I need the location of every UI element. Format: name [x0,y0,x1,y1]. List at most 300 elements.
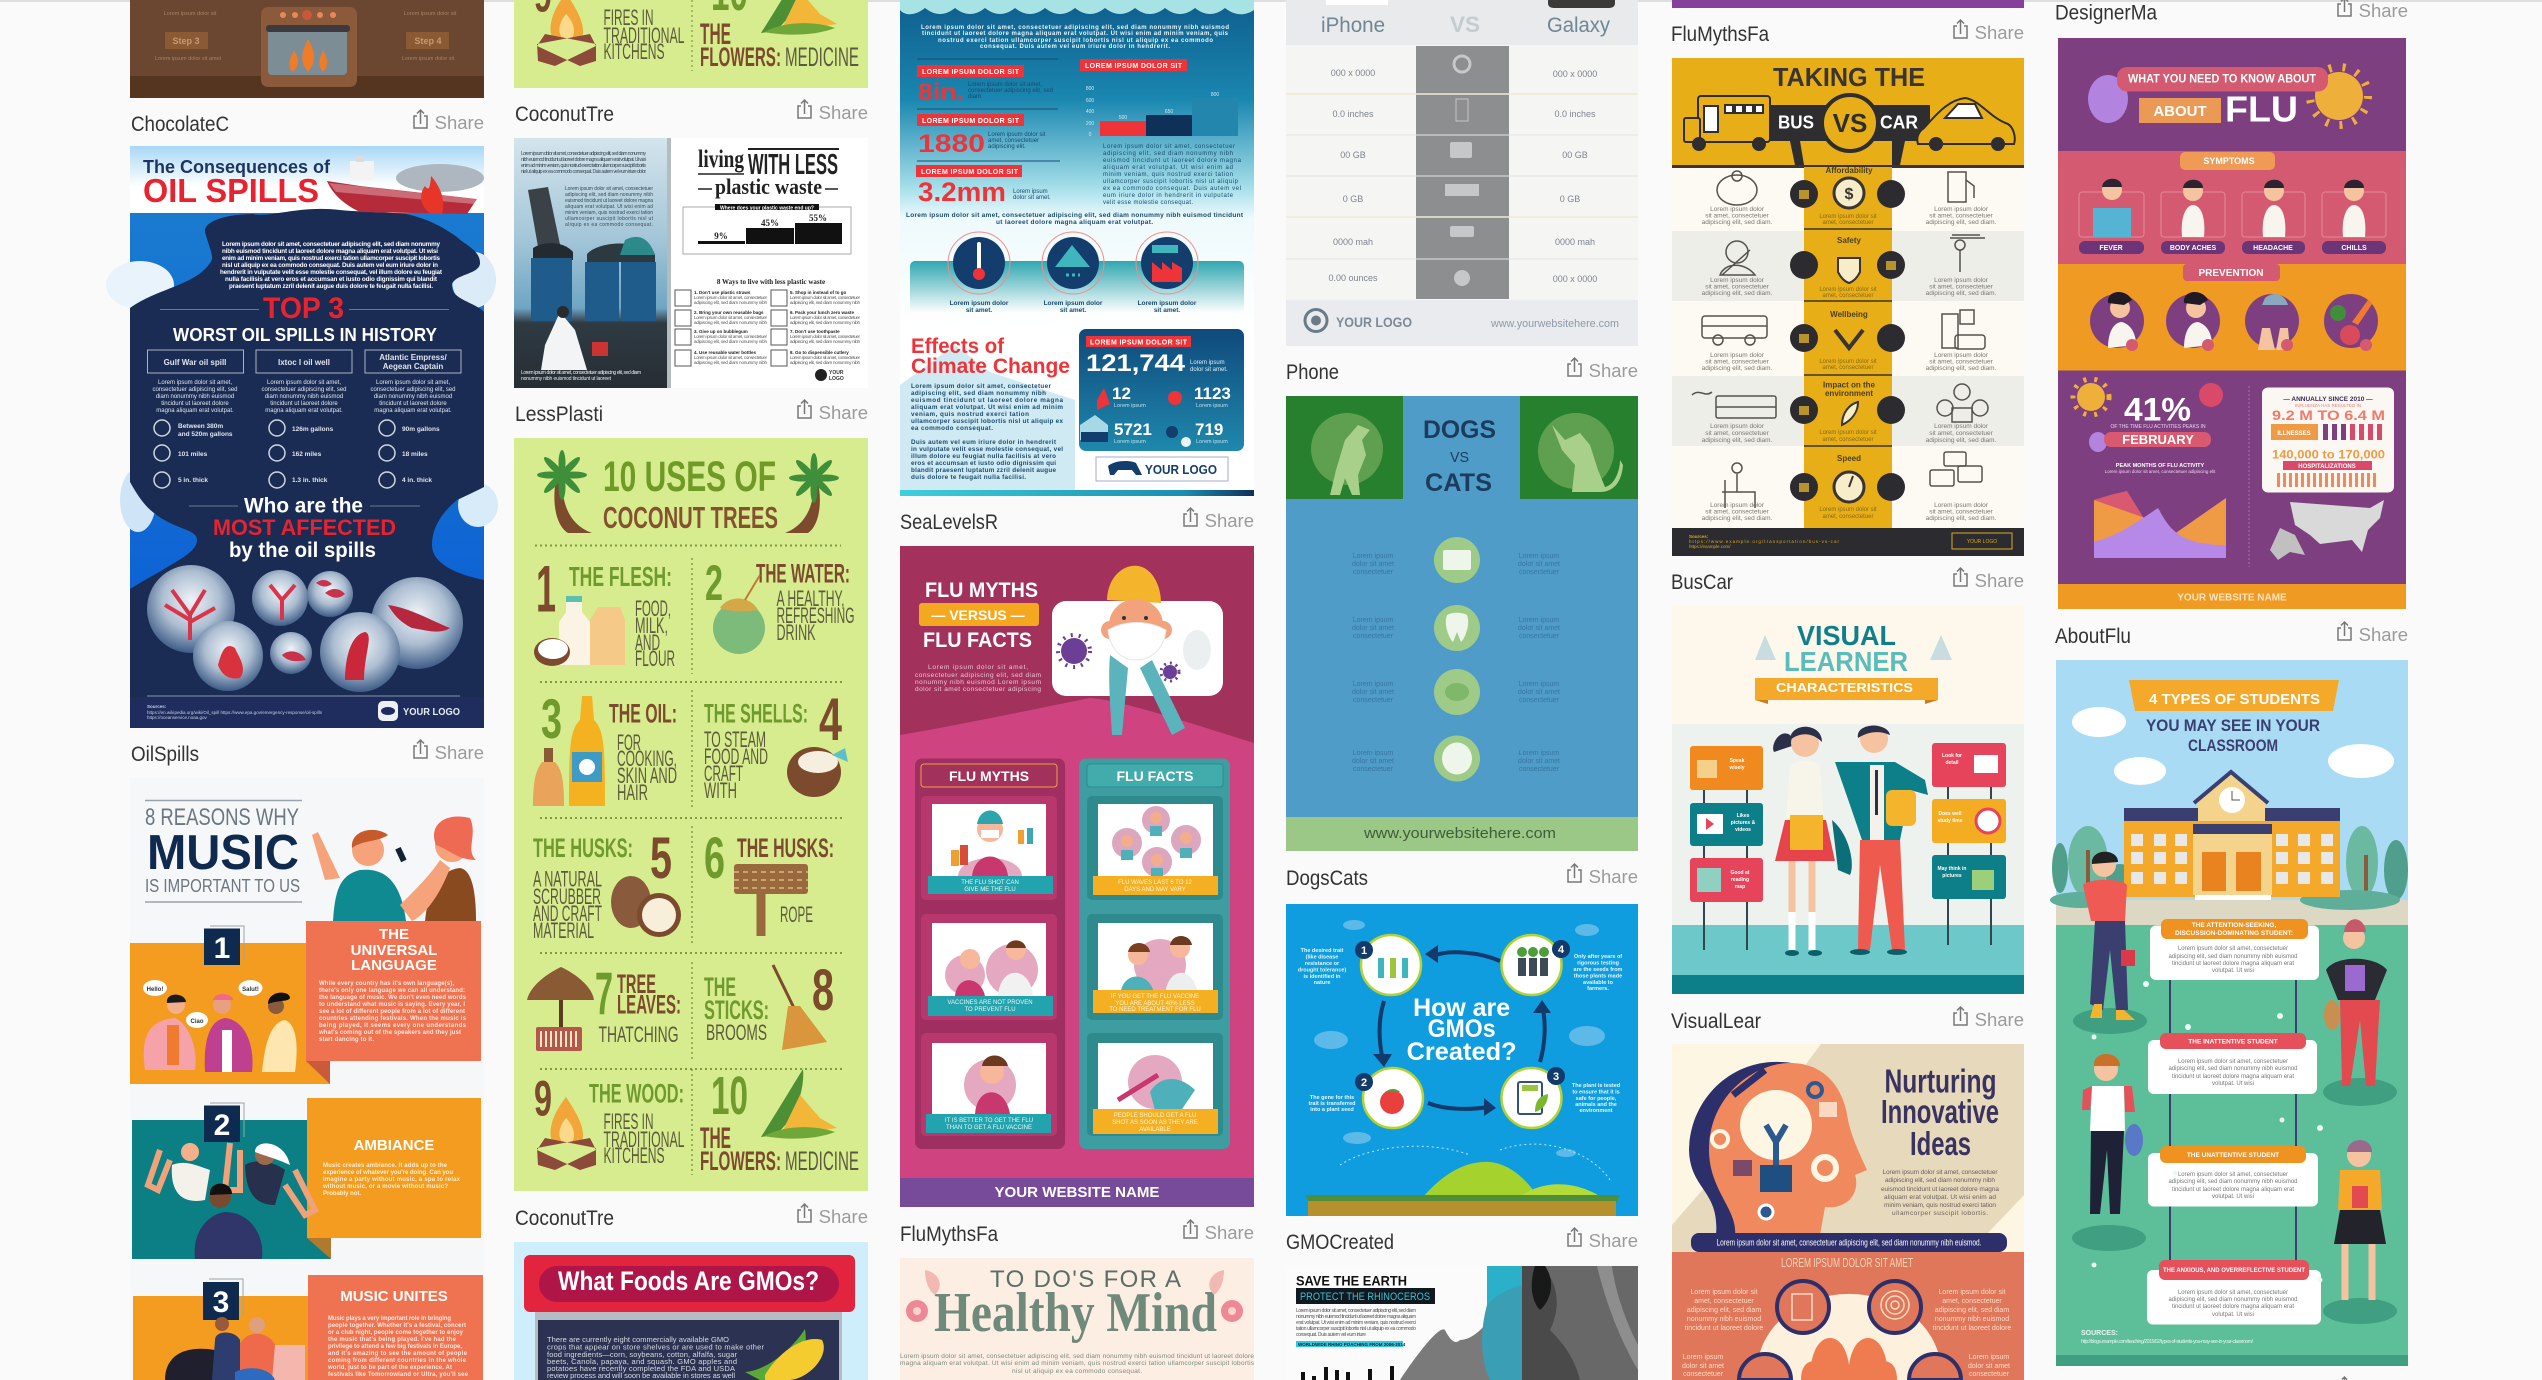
intro text: tincidunt ut laoreet dolore magna aliquam erat volutpat. Ut wisi enim ad minim veniam, quis [922,31,1229,37]
banner: CLASSROOM [2188,736,2278,755]
caption: SeaLevelsR [900,508,1254,534]
side text: nonummy nibh euismod [1687,1316,1761,1323]
step descriptions: rigorous testing [1577,960,1619,966]
row: wood and flowers: THE [700,18,731,51]
arrowheads [1373,945,1551,1116]
intro text: magna aliquam erat volutpat. Ut wisi enim ad minim veniam, quis nostrud exerci tation ullamcorper suscipit lobortis [900,1360,1255,1367]
use 3: oil: THE OIL: [609,698,677,728]
ways list: Lorem ipsum dolor sit amet, consectetuer [790,355,860,360]
center title: Created? [1407,1038,1517,1066]
step descriptions: The desired trait [1301,948,1344,954]
title: TO DO'S FOR A [990,1266,1181,1293]
column: flu facts: FLU FACTS [1116,768,1194,784]
center labels [1823,166,1876,463]
step descriptions: is identified in [1304,974,1341,980]
cycle arrows [1380,952,1545,1109]
column: flu myths: TO PREVENT FLU [964,1007,1016,1013]
panel: visual learner thumbnail [1672,606,2024,994]
ways list: 3. Give up on bubblegum [694,329,748,334]
illustration: three people [143,980,297,1072]
section 2: blocks [132,1098,481,1259]
header: TAKING THE [1773,62,1925,92]
row text: sit amet, consectetuer [1705,358,1770,366]
info card 4: THE ANXIOUS, AND OVERREFLECTIVE STUDENT [2163,1267,2305,1274]
stat values: 1880 [918,130,985,158]
number badges: 3 [1553,1071,1559,1083]
comparison icons [1434,537,1480,782]
illustration: friends on sofa [165,1317,305,1380]
caption: LessPlasti: Share [819,402,868,423]
marine life bubbles [147,565,463,692]
center labels: Speed [1837,454,1861,463]
step icons [1378,947,1549,1114]
stat: 41 percent: FEBRUARY [2122,432,2194,447]
text: ambiance: without music, or a movie without music? [322,1184,448,1190]
heading: top 3: WORST OIL SPILLS IN HISTORY [173,325,437,345]
intro text: potatoes have recently completed the FDA and USDA [547,1364,735,1373]
caption: OilSpills [131,740,484,766]
info card 2: volutpat. Ut wisi [2212,1081,2254,1087]
logo: YOUR [829,370,844,376]
stats panel: LOREM IPSUM DOLOR SIT [1090,340,1188,346]
intro text: Lorem ipsum dolor sit amet, consectetuer adipiscing elit, sed diam nonummy nibh euismod tincidunt ut laoreet dolore [900,1353,1254,1360]
panel: phone comparison thumbnail [1286,0,1638,346]
illustration: three people: Hello! [147,987,163,993]
stat: 41 percent: Lorem ipsum dolor sit amet, consectetuer adipiscing elit [2105,469,2216,474]
left and right icons [1692,171,1988,508]
title [143,157,331,209]
title: DOGS [1423,416,1496,444]
card: annual statistics: ILLNESSES [2277,431,2311,437]
left signs: pictures & [1731,820,1756,826]
side text: tincidunt ut laoreet dolore [1685,1325,1763,1332]
info card 4: volutpat. Ut wisi [2212,1312,2254,1318]
use 4: shells [704,686,848,803]
caption: GMOCreated: GMOCreated [1286,1231,1394,1254]
bar chart: 650 [1165,109,1173,115]
spill descriptions: tincidunt ut laoreet dolore [379,401,447,407]
use 7: leaves: TREE [617,969,656,999]
row: wood and flowers: FLOWERS: [700,42,781,72]
caption: GMOCreated: Share [1589,1230,1638,1251]
column: flu facts: AVAILABLE [1139,1127,1171,1133]
intro text: consequat. Duis autem vel eum iriure dolor in hendrerit. [980,44,1170,50]
snow dots [2092,981,2323,1282]
caption: SeaLevelsR: SeaLevelsR [900,511,998,534]
row text: Lorem ipsum [1353,681,1393,688]
title: Lorem ipsum dolor sit amet, [928,664,1028,671]
row text: sit amet, consectetuer [1929,358,1994,366]
title [2088,67,2368,130]
spill stats: 4 in. thick [402,477,432,484]
use 5: husks: MATERIAL [533,918,594,943]
text: chart notes: aliquam erat volutpat. Ut wisi enim ad [1103,165,1233,171]
header: VS [1833,108,1867,138]
title: COCONUT TREES [603,500,778,535]
use 7: leaves [527,960,681,1051]
text: universal language: what's coming out of the speakers and they just [318,1030,461,1036]
sources: http://blogs.example.com/teaching/2015/02/types-of-students-you-may-see-in-your-classroom/ [2081,1339,2254,1345]
title: CATS [1425,469,1492,497]
coral section [1672,1233,2024,1380]
footer: Sources: [1689,534,1709,539]
text: effects: Lorem ipsum dolor sit amet, consectetuer [911,383,1052,390]
step descriptions: trait is transferred [1308,1101,1356,1107]
title: FLU FACTS [923,629,1032,652]
icon: bus [1684,96,1770,150]
stats panel: 121,744 [1086,350,1186,377]
bottom strip [900,490,1254,496]
center strip [1804,167,1892,531]
caption: FluMythsFa column five: Share [1975,22,2024,43]
column: flu facts: FLU WAVES LAST 6 TO 12 [1118,880,1193,886]
info card 1: tincidunt ut laoreet dolore magna aliquam erat [2172,961,2294,967]
bar chart: Where does your plastic waste end up? [720,206,814,212]
caption: Phone [1286,358,1638,384]
panel: oil spills thumbnail [106,146,498,728]
title: — VERSUS — [931,607,1025,623]
icon glyphs [1845,186,1854,487]
use 9 and 10: wood and flowers: TRADITIONAL [604,1127,684,1152]
panel: sea levels thumbnail [900,0,1254,496]
row text: adipiscing elit, sed diam. [1702,219,1773,226]
column: flu facts: DAYS AND MAY VARY [1124,887,1186,893]
column: flu facts: SHOT AS SOON AS THEY ARE [1112,1120,1198,1126]
banner: 4 TYPES OF STUDENTS [2149,691,2320,708]
icon glyphs: $ [1845,186,1854,203]
use 2: water [705,555,854,654]
center text [1819,214,1877,520]
stat: 41 percent: PEAK MONTHS OF FLU ACTIVITY [2116,463,2205,469]
stat labels: LOREM IPSUM DOLOR SIT [922,118,1020,125]
center labels: Safety [1837,236,1862,245]
number badge 1 [204,926,244,965]
intro text: nibh euismod tincidunt ut laoreet dolore magna aliquam erat volutpat. Ut wisi [222,248,438,255]
panel: music thumbnail [130,800,483,1380]
column: flu myths: VACCINES ARE NOT PROVEN [947,1000,1033,1006]
photo text: enim ad minim veniam, quis nostrud exerci tation ullamcorper suscipit lobortis [521,163,646,169]
step descriptions: those plants made [1574,974,1622,980]
top edge strip [0,0,2542,2]
text: universal language: LANGUAGE [351,957,437,974]
use 1: flesh: 1 [536,552,556,626]
caption: CoconutTre second: CoconutTre [515,1207,614,1230]
title: 8 REASONS WHY [145,804,299,831]
title [1296,1272,1435,1304]
spill descriptions: diam nonummy nibh euismod [265,394,343,400]
row text: sit amet, consectetuer [1929,284,1994,290]
caption: DogsCats [1286,864,1638,890]
photo text: Lorem ipsum dolor sit amet, consectetuer [565,186,653,192]
column: flu facts: IF YOU GET THE FLU VACCINE [1111,994,1199,1000]
use 8: sticks: THE [704,972,736,1002]
bar chart: 9% [714,231,728,241]
text: universal language [318,926,467,1043]
dog tile [1286,396,1403,499]
step descriptions: farmers. [1587,986,1609,992]
spec values: 000 x 0000 [1331,68,1375,78]
intro text: minim veniam, quis nostrud exerci tation [1884,1202,1996,1209]
left signs: wisely [1728,765,1745,771]
row text: sit amet, consectetuer [1705,284,1770,290]
use 9 and 10: wood and flowers: 10 [711,1066,748,1126]
stats panel [1079,329,1244,451]
center text: Lorem ipsum dolor sit [1819,214,1877,220]
header [1286,0,1638,45]
title [915,579,1041,693]
caption: DesignerMa [2055,0,2408,25]
intro text: consequat. Duis autem vel eum iriure [1296,1332,1366,1338]
right signs: pictures [1942,873,1962,879]
photo text: Lorem ipsum dolor sit amet, consectetuer adipiscing elit, sed diam nonummy [521,151,646,157]
title: FLU [2225,88,2298,130]
illustration: boy [1835,725,1928,955]
text: chart notes: ex ea commodo consequat. Duis autem vel [1103,186,1241,192]
ways list: Lorem ipsum dolor sit amet, consectetuer [790,334,860,339]
sources [2081,1330,2254,1345]
title [145,800,302,902]
spill descriptions: magna aliquam erat volutpat. [374,408,452,414]
row text [1352,553,1560,773]
row text: Lorem ipsum dolor [1934,277,1989,284]
spill descriptions: Lorem ipsum dolor sit amet, [158,380,232,386]
spill descriptions: consectetuer adipiscing elit, sed [152,387,238,393]
caption: DogsCats: Share [1589,866,1638,887]
bar chart: 800 [1086,86,1094,92]
use 4: shells: FOOD AND [704,744,768,769]
stat: 41 percent: 41% [2124,392,2191,428]
row text: Lorem ipsum dolor [1710,423,1765,430]
spill name boxes [148,350,461,373]
photo text: aliquam erat volutpat. Ut wisi enim ad [565,204,653,210]
bar chart: 800 [1211,92,1219,98]
intro text [547,1335,764,1380]
row text: sit amet, consectetuer [1705,508,1770,516]
connector lines [2170,980,2296,1260]
title [1423,416,1496,497]
illustration: girl [1773,727,1852,956]
text: summary: ut laoreet dolore magna aliquam erat volutpat. [996,219,1153,226]
panel: rhino thumbnail [1296,1266,1638,1380]
stats panel: 719 [1195,420,1223,439]
info card 3: Lorem ipsum dolor sit amet, consectetuer [2178,1172,2288,1178]
use 9 and 10: wood and flowers: FIRES IN [604,1109,654,1134]
text: universal language: the language of music. We don't even need words [319,995,467,1001]
text: chart notes: velit esse molestie consequat. [1103,200,1193,206]
title: LEARNER [1784,646,1908,677]
stats panel: Lorem ipsum [1114,403,1146,409]
icon circles [1739,1281,1961,1380]
step circles [1361,935,1562,1128]
text: music unites: people together. Whether it's a festival, concert [328,1323,466,1329]
stat values: 3.2mm [918,177,1006,207]
number badges [1355,940,1570,1091]
text: effects: in vulputate velit esse molestie consequat, vel [911,446,1063,453]
info card 1: volutpat. Ut wisi [2212,968,2254,974]
caption: OilSpills: Share [435,742,484,763]
row text: Lorem ipsum dolor [1710,352,1765,359]
row text: Lorem ipsum [1519,553,1559,560]
intro text: Lorem ipsum dolor sit amet, consectetuer adipiscing elit, sed diam nonummy [222,241,440,248]
caption: AboutFlu: Share [2359,624,2408,645]
use 6: rope: 6 [704,826,725,891]
intro text [921,25,1229,50]
use 3: oil: 3 [541,687,562,750]
heading: most affected: Who are the [244,494,363,518]
spill names: Atlantic Empress/ [379,353,448,362]
left signs: Speak [1730,758,1745,764]
step descriptions: to ensure that it is [1572,1090,1620,1096]
effect captions: sit amet. [1060,307,1086,314]
text: music unites: coming from different countries in the whole [328,1358,467,1364]
panel: healthy mind thumbnail [900,1258,1255,1380]
title: FLU MYTHS [925,579,1038,602]
icon: brain [1801,1338,1897,1380]
intro text: nisl ut aliquip ex ea commodo consequat. Duis autem vel eum iriure dolor in [222,262,438,269]
photo text [521,151,654,382]
row text: Lorem ipsum dolor [1934,206,1989,213]
panel: less plastic thumbnail [514,138,860,388]
text: music unites [327,1288,469,1378]
spec values: 00 GB [1340,150,1366,160]
text: universal language: start dancing to it. [319,1037,374,1043]
ways list [675,278,860,366]
symptoms: SYMPTOMS [2203,156,2255,166]
number badges: 1 [1361,945,1367,957]
title: IS IMPORTANT TO US [145,876,300,896]
intro text: There are currently eight commercially available GMO [547,1335,729,1344]
row: wood and flowers: KITCHENS [604,39,664,64]
right signs: Does well [1938,811,1962,817]
spec values: 0.0 inches [1332,109,1374,119]
panel: flu strip thumbnail [1672,0,2024,8]
text: effects: blandit praesent luptatum zzril delenit augue [911,467,1056,474]
panel: types of students thumbnail [2050,660,2408,1366]
spill stats: 5 in. thick [178,477,208,484]
card: annual statistics: 140,000 to 170,000 [2272,450,2385,462]
caption: DesignerMa: Share [2359,0,2408,21]
info card 4: adipiscing elit, sed diam nonummy nibh euismod [2168,1297,2298,1303]
logo [815,369,844,382]
spill descriptions: magna aliquam erat volutpat. [156,408,234,414]
spill stats: 126m gallons [292,426,334,433]
spill stat icons [154,420,395,488]
ways list: 2. Bring your own reusable bags [694,310,764,315]
footer [1286,817,1638,851]
panel: coconut trees thumbnail [514,438,868,1191]
photo text: ullamcorper suscipit lobortis nisl ut [565,216,654,222]
side text: Lorem ipsum dolor sit [1939,1289,2006,1296]
side text: amet, consectetuer [1942,1298,2002,1305]
intro text: hendrerit in vulputate velit esse molestie consequat, vel illum dolore eu feugiat [220,269,443,276]
title: living [698,146,744,173]
row text: consectetuer [1353,569,1394,576]
row text: dolor sit amet [1518,758,1560,765]
card: annual statistics [2262,388,2394,492]
text: effects [911,383,1063,481]
icon: head with bulb [1689,1062,1867,1235]
step labels: Lorem ipsum dolor sit [404,11,457,17]
info card 1 [2150,919,2319,980]
section 1: blocks [130,921,481,1084]
right signs: May think in [1938,866,1966,872]
use 3: oil: HAIR [617,780,648,805]
spec values: 0.0 inches [1554,109,1596,119]
effect captions: sit amet. [966,307,992,314]
text: effects: Duis autem vel eum iriure dolor in hendrerit [911,439,1057,446]
header: VS [1450,12,1480,37]
row text: Lorem ipsum dolor [1710,206,1765,213]
text: chart notes: euismod tincidunt ut laoreet dolore magna [1103,158,1242,164]
intro text: adipiscing elit, sed diam nonummy nibh [1885,1177,1995,1184]
intro text: aliquam erat volutpat. Ut wisi enim ad [1884,1194,1996,1201]
heading: effects: Effects of [911,335,1005,358]
title [698,146,839,199]
caption: FluMythsFa column five [1671,20,2024,46]
right signs: study time [1937,818,1963,824]
caption: VisualLear [1671,1007,2024,1033]
info card 4: Lorem ipsum dolor sit amet, consectetuer [2178,1290,2288,1296]
step descriptions: The plant is tested [1572,1083,1620,1089]
number badge 2: 2 [214,1109,230,1142]
intro text: tation ullamcorper suscipit lobortis nisl ut aliquip ex ea commodo [1296,1326,1416,1332]
info card 4: tincidunt ut laoreet dolore magna aliquam erat [2172,1304,2294,1310]
step labels: Lorem ipsum dolor sit [402,56,455,62]
heading: top 3 [160,292,449,345]
step descriptions: The gene for this [1310,1095,1354,1101]
caption: AboutFlu: AboutFlu [2055,625,2131,648]
prevention: PREVENTION [2198,268,2264,279]
use 5: husks: A NATURAL [533,866,602,892]
row text: consectetuer [1519,697,1560,704]
number badge 3: 3 [213,1286,229,1319]
text: ambiance: Probably not. [323,1191,361,1197]
caption: CoconutTre [515,100,868,126]
intro text [900,1353,1255,1375]
caption: GMOCreated [1286,1228,1638,1254]
stats panel: Lorem ipsum [1190,360,1225,366]
row text: sit amet, consectetuer [1705,430,1770,437]
title: 10 USES OF [603,453,776,501]
row text: adipiscing elit, sed diam. [1926,515,1997,522]
stats panel: 12 [1112,384,1131,403]
title: SAVE THE EARTH [1296,1272,1407,1288]
share icon tip: bottom of column six [2342,1377,2347,1380]
text: summary: Lorem ipsum dolor sit amet, consectetuer adipiscing elit, sed diam nonummy nibh euismod tincidunt [906,212,1244,219]
footer: YOUR LOGO [403,707,460,718]
use 8: sticks: STICKS: [704,995,769,1025]
step labels: Step 4 [414,36,442,46]
title: PROTECT THE RHINOCEROS [1300,1291,1430,1303]
stat values [918,79,1053,207]
number badges: 4 [1558,944,1565,956]
photo text: Lorem ipsum dolor sit amet, consectetuer adipiscing elit, sed diam [521,370,641,376]
symptoms: HEADACHE [2253,245,2293,252]
thumb marks [1799,190,1896,492]
spill stats: Between 380m [178,423,223,430]
row text: Lorem ipsum [1519,681,1559,688]
use 4: shells: TO STEAM [704,727,766,752]
bar chart [1086,86,1238,138]
row text: Lorem ipsum [1353,617,1393,624]
side text [1682,1289,2011,1378]
use 2: water: DRINK [776,620,816,645]
footer [1286,300,1638,346]
panel: bus vs car thumbnail [1672,58,2024,556]
row: wood and flowers [534,0,859,72]
footer: www.yourwebsitehere.com [1490,318,1619,330]
banner: YOU MAY SEE IN YOUR [2146,716,2320,735]
